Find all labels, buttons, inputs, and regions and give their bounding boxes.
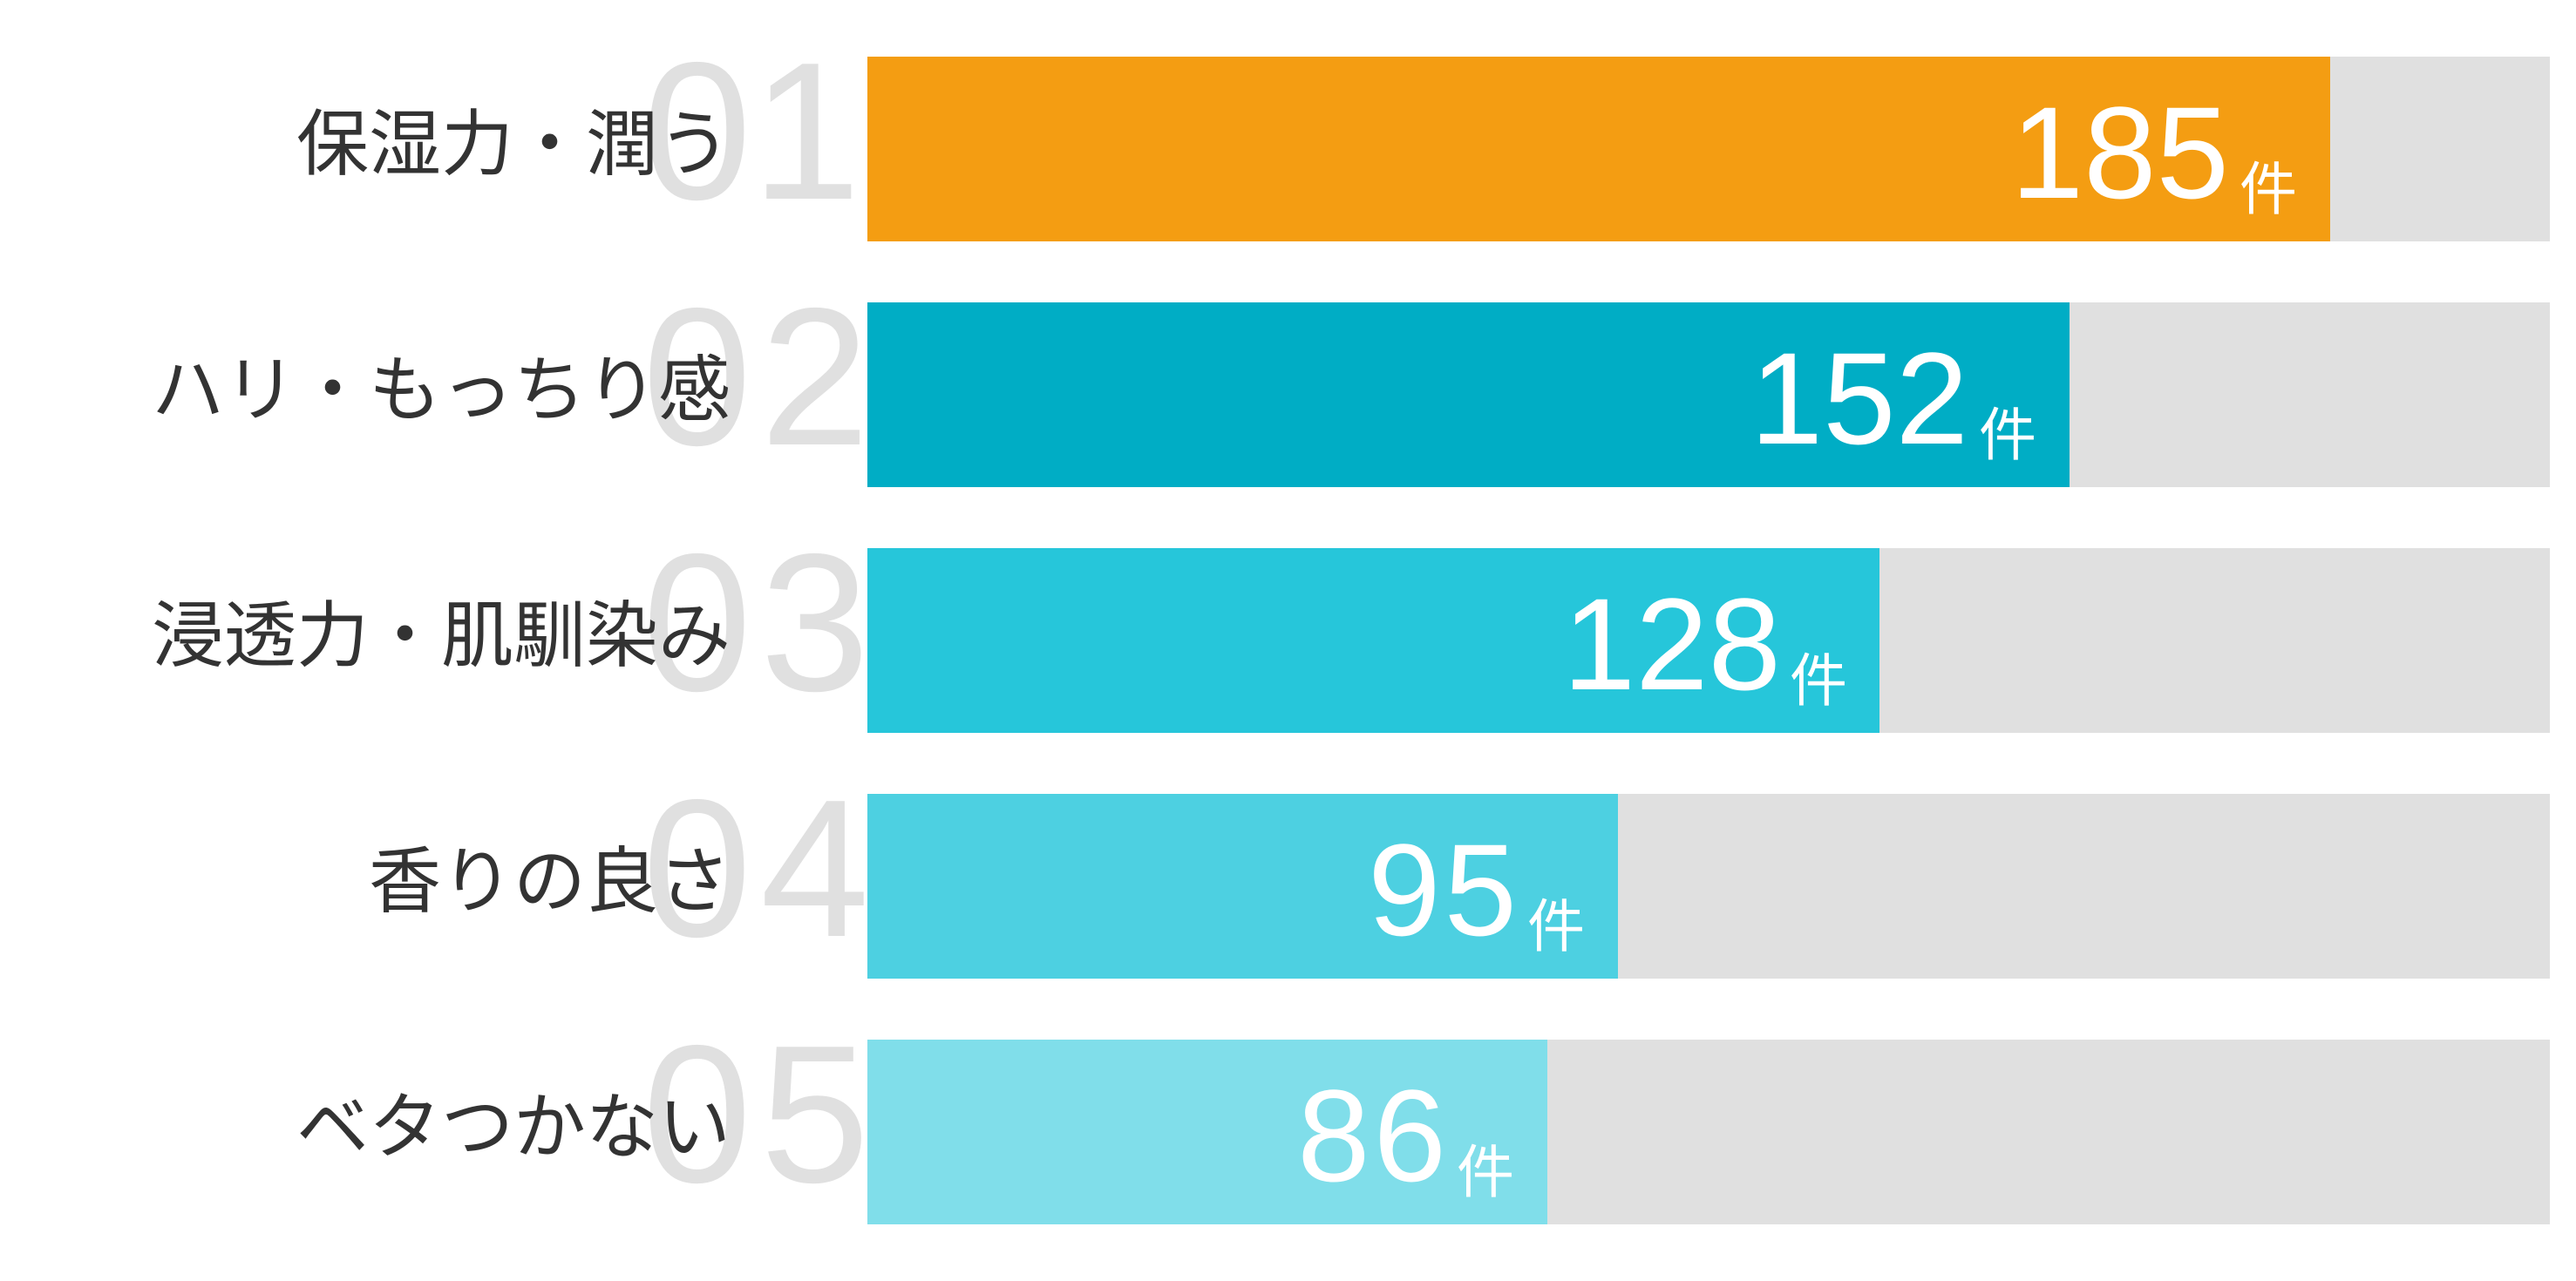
- unit: 件: [1790, 648, 1847, 713]
- bar value: [867, 794, 1618, 979]
- bar track: [867, 302, 2550, 487]
- row 1: 保湿力・潤う 185件: [296, 21, 2550, 241]
- value: 128: 128: [1563, 571, 1781, 717]
- row 4: 香りの良さ 95件: [369, 758, 2550, 979]
- rank number 02: 02: [642, 267, 878, 486]
- label: 香りの良さ: 香りの良さ: [369, 841, 731, 922]
- bar track: [867, 1040, 2550, 1224]
- rank number 05: 05: [642, 1004, 878, 1223]
- label: 浸透力・肌馴染み: 浸透力・肌馴染み: [152, 595, 731, 676]
- label: ハリ・もっちり感: ハリ・もっちり感: [152, 349, 731, 430]
- row 3: 浸透力・肌馴染み 128件: [152, 512, 2550, 733]
- value: 95: 95: [1368, 817, 1520, 963]
- bar value: [867, 1040, 1547, 1224]
- label: ベタつかない: ベタつかない: [296, 1087, 731, 1168]
- bar track: [867, 57, 2550, 241]
- bar track: [867, 548, 2550, 733]
- unit: 件: [2240, 157, 2297, 221]
- unit: 件: [1527, 894, 1585, 959]
- row 2: ハリ・もっちり感 152件: [152, 267, 2550, 487]
- value: 185: 185: [2011, 79, 2229, 226]
- rank number 04: 04: [642, 758, 878, 978]
- rank number 01: 01: [642, 21, 860, 241]
- rank number 03: 03: [642, 512, 878, 732]
- bar value: [867, 548, 1879, 733]
- unit: 件: [1979, 403, 2036, 467]
- value: 86: 86: [1297, 1062, 1450, 1209]
- unit: 件: [1457, 1140, 1514, 1204]
- bar value: [867, 57, 2330, 241]
- bar track: [867, 794, 2550, 979]
- label: 保湿力・潤う: 保湿力・潤う: [296, 104, 731, 185]
- bar value: [867, 302, 2070, 487]
- row 5: ベタつかない 86件: [296, 1004, 2550, 1224]
- value: 152: 152: [1750, 325, 1968, 471]
